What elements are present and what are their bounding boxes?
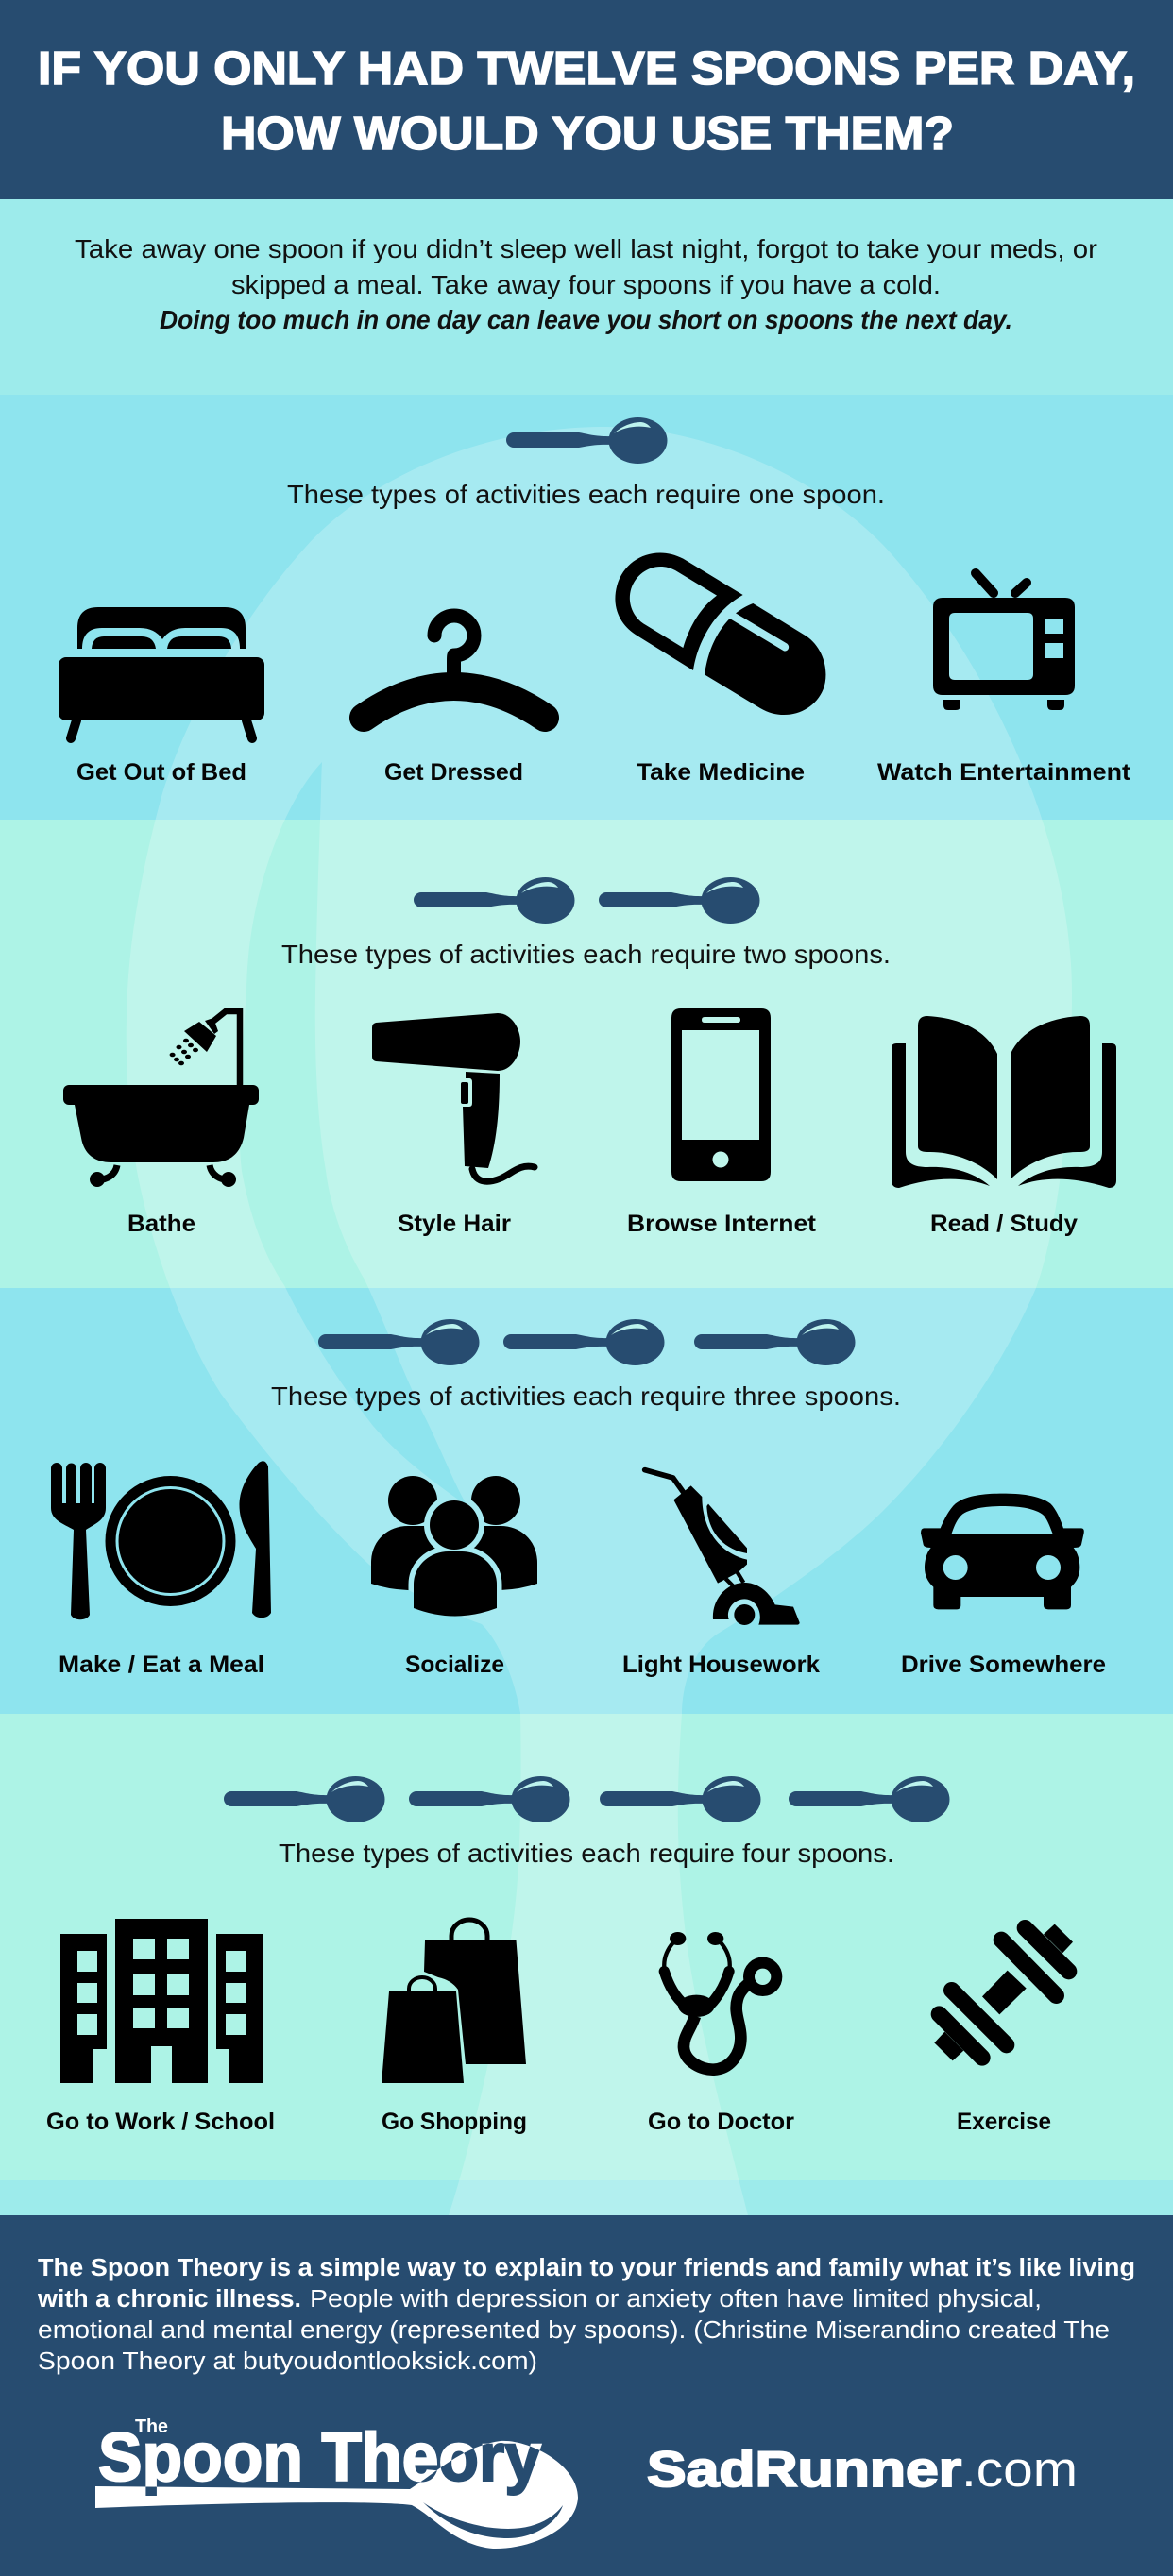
label: exercise: Exercise [957, 2109, 1051, 2135]
footer explanation text: People with depression or anxiety often have limited physical, [310, 2286, 1042, 2313]
icon: smartphone [672, 1008, 771, 1181]
background watermark: large spoon [127, 427, 1072, 2215]
footer explanation text: emotional and mental energy (represented by spoons). (Christine Miserandino created The [38, 2317, 1110, 2344]
label: drive somewhere: Drive Somewhere [901, 1652, 1106, 1678]
panel background: lower band [0, 2180, 1173, 2215]
label: take medicine: Take Medicine [637, 759, 805, 786]
icon: people [371, 1476, 537, 1617]
icon: hanger [364, 616, 545, 718]
icon: spoon [506, 417, 667, 464]
icon: spoons [414, 877, 759, 924]
label: make / eat a meal: Make / Eat a Meal [59, 1652, 264, 1678]
icon: bed [59, 607, 264, 738]
footer explanation text: Spoon Theory at butyoudontlooksick.com) [38, 2348, 537, 2375]
panel background: two spoons section [0, 820, 1173, 1288]
label: go to doctor: Go to Doctor [648, 2109, 794, 2135]
footer explanation text: The Spoon Theory is a simple way to explain to your friends and family what it’s like living [38, 2255, 1135, 2281]
label: go to work / school: Go to Work / School [46, 2109, 275, 2135]
panel background: intro band [0, 199, 1173, 395]
title line 1: IF YOU ONLY HAD TWELVE SPOONS PER DAY, [38, 43, 1135, 94]
icon: hair dryer [372, 1013, 535, 1181]
footer explanation text [37, 2255, 1135, 2375]
icon: shopping bags [382, 1920, 526, 2083]
panel: one spoon activities [59, 417, 1131, 786]
icon: fork, plate and knife [51, 1461, 271, 1619]
panel background: four spoons section [0, 1714, 1173, 2180]
logo: sadrunner.com: SadRunner [647, 2442, 961, 2498]
label: go shopping: Go Shopping [382, 2109, 527, 2135]
intro text: Take away one spoon if you didn’t sleep well last night, forgot to take your meds, or [75, 234, 1097, 263]
icon: car [921, 1494, 1084, 1609]
icon: stethoscope [664, 1932, 776, 2070]
logo: the spoon theory: The [135, 2416, 168, 2437]
label: watch entertainment: Watch Entertainment [877, 759, 1131, 786]
logo: the spoon theory [95, 2416, 578, 2549]
icon: open book [892, 1016, 1116, 1188]
footer explanation text: with a chronic illness. [37, 2286, 301, 2313]
panel background: one spoon section [0, 395, 1173, 820]
footer panel [38, 2258, 1133, 2549]
label: read / study: Read / Study [930, 1211, 1078, 1237]
icon: vacuum cleaner [645, 1470, 800, 1625]
logo: sadrunner.com: .com [961, 2442, 1078, 2498]
icon: pill [615, 552, 825, 715]
panel: three spoon activities [51, 1319, 1106, 1678]
panel: two spoon activities [63, 877, 1116, 1237]
label: browse internet: Browse Internet [627, 1211, 817, 1237]
heading: two spoons: These types of activities each require two spoons. [281, 940, 891, 969]
logo: the spoon theory: Spoon Theory [98, 2420, 541, 2496]
icon: spoons [318, 1319, 856, 1365]
label: light housework: Light Housework [622, 1652, 820, 1678]
title line 2: HOW WOULD YOU USE THEM? [221, 109, 954, 160]
label: get dressed: Get Dressed [384, 759, 523, 786]
icon: office buildings [60, 1919, 263, 2083]
logo: sadrunner.com [647, 2442, 1078, 2498]
icon: spoons [224, 1776, 950, 1822]
intro text: skipped a meal. Take away four spoons if you have a cold. [231, 270, 941, 299]
icon: dumbbell [934, 1924, 1073, 2060]
label: socialize: Socialize [405, 1652, 504, 1678]
label: get out of bed: Get Out of Bed [76, 759, 246, 786]
panel background: three spoons section [0, 1288, 1173, 1714]
icon: television [933, 573, 1075, 710]
label: bathe: Bathe [128, 1211, 196, 1237]
label: style hair: Style Hair [398, 1211, 511, 1237]
heading: four spoons: These types of activities each require four spoons. [279, 1839, 894, 1868]
icon: bathtub [63, 1011, 259, 1187]
header [0, 0, 1173, 199]
heading: one spoon: These types of activities each require one spoon. [287, 480, 885, 509]
heading: three spoons: These types of activities each require three spoons. [271, 1381, 901, 1411]
intro text [75, 234, 1097, 334]
panel: four spoon activities [46, 1776, 1073, 2135]
intro text: Doing too much in one day can leave you short on spoons the next day. [160, 305, 1012, 334]
